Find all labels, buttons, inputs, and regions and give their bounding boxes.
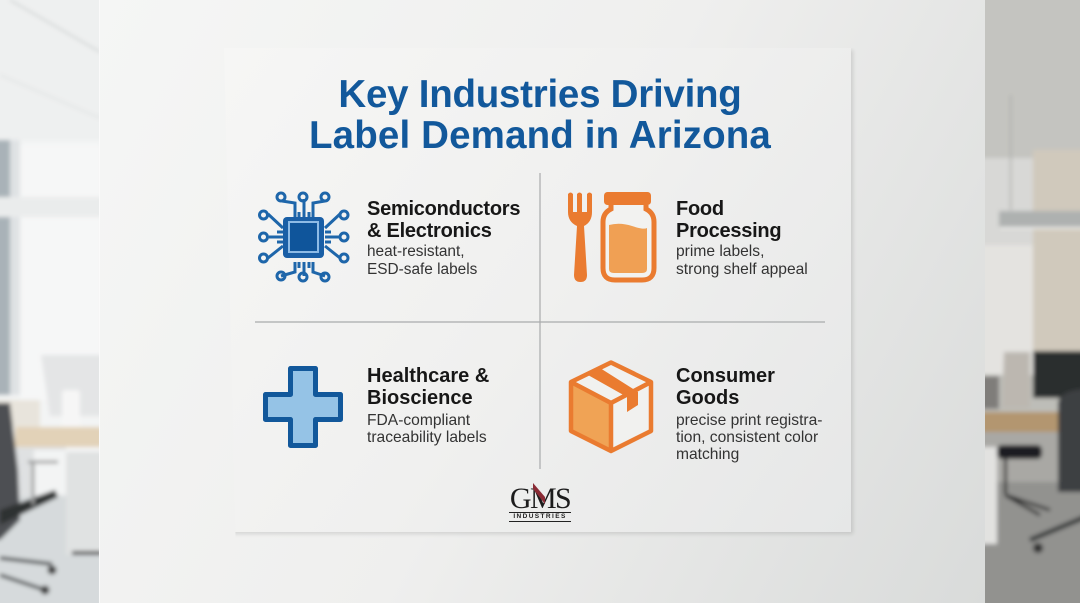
icon: cardboard box	[568, 360, 654, 454]
panel: sign board	[224, 48, 851, 532]
logo mark accent	[533, 483, 545, 504]
icon: circuit chip	[258, 192, 350, 282]
panel: semiconductors	[258, 192, 520, 282]
heading	[367, 198, 520, 242]
heading: Goods	[676, 387, 739, 409]
title: Label Demand in Arizona	[309, 114, 771, 157]
heading	[676, 198, 781, 242]
description: strong shelf appeal	[676, 261, 808, 278]
panel: food processing	[568, 192, 808, 282]
logo wordmark: GMS	[510, 482, 570, 515]
panel: healthcare	[263, 365, 489, 448]
description: ESD-safe labels	[367, 261, 477, 278]
heading: Processing	[676, 220, 781, 242]
description	[676, 243, 808, 278]
description: FDA-compliant	[367, 412, 470, 429]
icon: medical cross	[263, 366, 343, 448]
heading: Semiconductors	[367, 198, 520, 220]
description	[367, 412, 487, 446]
description	[367, 243, 477, 278]
description	[676, 412, 822, 463]
heading	[676, 365, 775, 409]
heading: Bioscience	[367, 387, 473, 409]
description: heat-resistant,	[367, 243, 465, 260]
logo: GMS Industries	[509, 482, 571, 522]
description: traceability labels	[367, 429, 487, 446]
panel: consumer goods	[568, 360, 822, 463]
logo subtitle	[509, 512, 571, 522]
icon: fork and jar	[568, 192, 656, 282]
title: Key Industries Driving	[338, 73, 742, 116]
description: tion, consistent color	[676, 429, 818, 446]
description: precise print registra-	[676, 412, 822, 429]
heading: & Electronics	[367, 220, 492, 242]
heading	[367, 365, 489, 409]
heading: Healthcare &	[367, 365, 489, 387]
quadrant dividers	[255, 173, 825, 469]
title	[309, 73, 772, 157]
heading: Consumer	[676, 365, 775, 387]
logo subtitle: INDUSTRIES	[513, 513, 567, 520]
description: matching	[676, 446, 739, 463]
heading: Food	[676, 198, 724, 220]
description: prime labels,	[676, 243, 764, 260]
